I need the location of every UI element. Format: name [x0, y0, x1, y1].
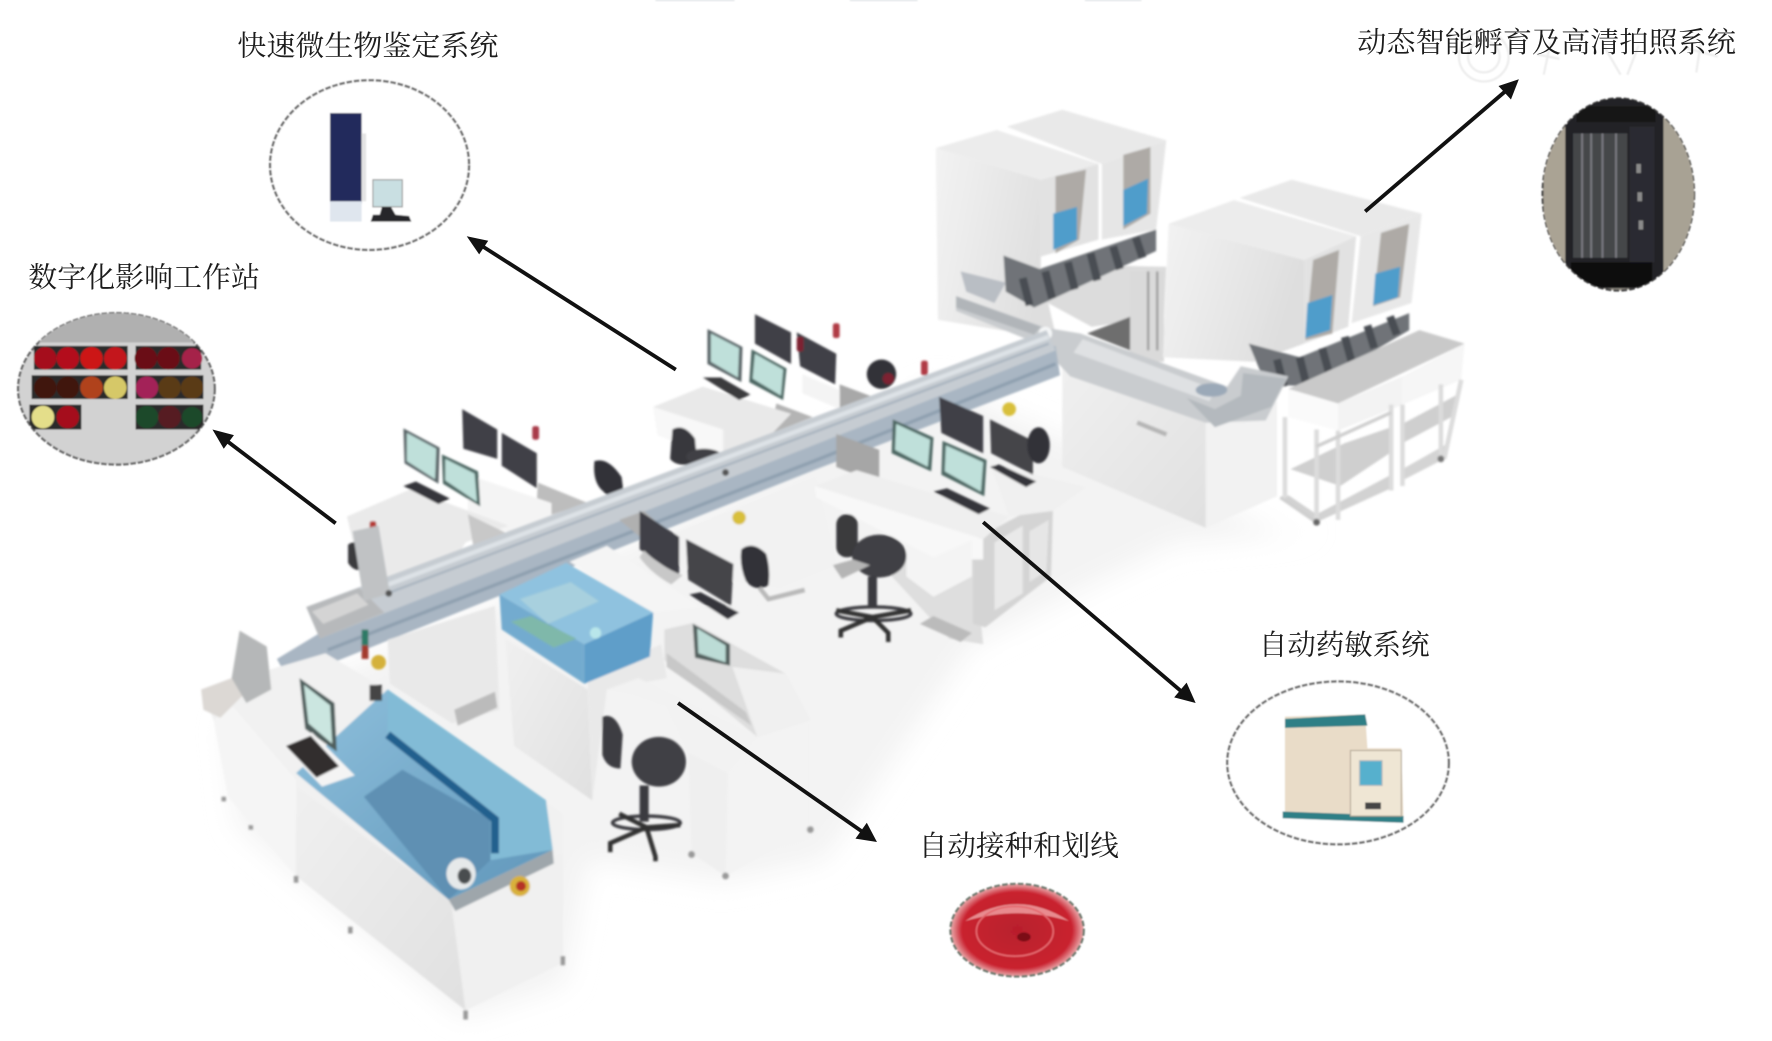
callout: digital imaging workstation: [17, 262, 260, 465]
monitors: [755, 314, 791, 364]
watermark: [1459, 32, 1718, 81]
callout: dynamic incubation and imaging system: [1357, 27, 1736, 294]
automation line illustration: [201, 110, 1465, 1019]
shelf units: [1280, 330, 1465, 526]
printer unit with screen: [664, 623, 810, 737]
callout: automatic inoculation and streaking: [919, 831, 1119, 976]
callout: automatic susceptibility system: [1227, 629, 1449, 844]
workstation: upper desk: [653, 314, 928, 465]
heading: rapid identification: 快速微生物鉴定系统: [237, 30, 498, 62]
heading: inoculation: 自动接种和划线: [919, 831, 1119, 863]
left plate sorter machine: [201, 630, 563, 1019]
main conveyor rail: [277, 330, 1060, 669]
incubator group: rear: [936, 110, 1166, 362]
arrow: to dynamic incubation system: [1365, 79, 1519, 211]
arrow: to automatic susceptibility system: [983, 522, 1196, 703]
incubator group: front: [1163, 180, 1422, 387]
heading: susceptibility: 自动药敏系统: [1259, 629, 1430, 661]
red petri dish: [950, 884, 1084, 976]
transverse conveyor: [956, 271, 1288, 427]
circle with plate grid: [17, 313, 216, 465]
stool chair center: [602, 716, 686, 861]
arrow: to automatic inoculation and streaking: [678, 703, 877, 842]
circle with analyzer: [1227, 682, 1449, 844]
wall panel under rail: [388, 606, 500, 726]
heading: digital imaging: 数字化影响工作站: [28, 262, 260, 294]
callout: rapid identification system: [237, 30, 498, 250]
circle with instrument: [270, 80, 469, 250]
arrow: to digital imaging workstation: [212, 430, 336, 523]
center workstation monitors: [607, 511, 805, 667]
floor shadow: [226, 384, 1322, 1017]
analyzer base cabinet: [1062, 362, 1277, 528]
workstation: right desk: [644, 397, 1086, 644]
center blue analyzer: [500, 546, 701, 800]
oval with incubator interior: [1543, 96, 1697, 294]
arrow: to rapid identification system: [467, 236, 676, 370]
heading: dynamic incubation: 动态智能孵育及高清拍照系统: [1357, 27, 1736, 59]
stool chair right: [833, 514, 911, 642]
curved desk: [607, 678, 814, 879]
scan marks along top edge: [655, 0, 1141, 1]
workstation: left desk: [347, 409, 624, 610]
